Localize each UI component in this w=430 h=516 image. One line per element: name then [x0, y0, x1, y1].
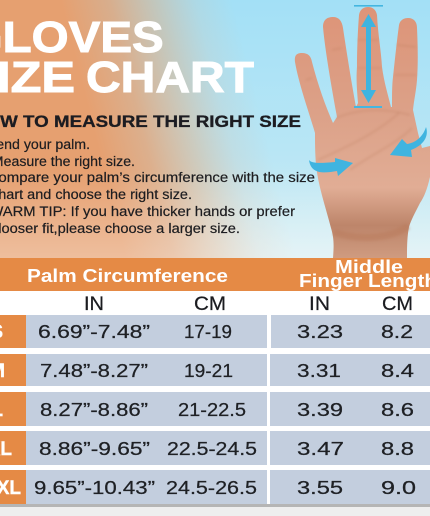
instructions text block	[0, 137, 315, 236]
finger inch values: 3.47	[297, 438, 344, 459]
column headers: IN	[309, 294, 330, 315]
palm inch values: 9.65”-10.43”	[34, 477, 155, 498]
size table	[0, 257, 430, 516]
header bar	[0, 258, 430, 291]
palm cm values: 24.5-26.5	[166, 477, 257, 498]
column headers: IN	[84, 294, 104, 315]
row backgrounds	[26, 315, 430, 504]
icon: left palm arrow	[309, 158, 353, 176]
finger cm values: 8.8	[381, 438, 414, 459]
finger cm values: 8.6	[381, 399, 414, 420]
palm cm values: 22.5-24.5	[167, 438, 257, 459]
header: palm circumference: Palm Circumference	[27, 265, 228, 286]
icon: photo of open hand	[295, 7, 430, 258]
column headers	[84, 294, 413, 315]
finger cm values: 8.2	[381, 321, 413, 342]
finger inch values: 3.31	[297, 360, 341, 381]
table bottom shadow	[0, 504, 430, 516]
column headers: CM	[194, 294, 226, 315]
finger cm values	[381, 321, 416, 498]
column headers: CM	[382, 294, 413, 315]
header: middle finger length	[299, 257, 430, 291]
palm inch values	[34, 321, 155, 498]
finger cm values: 8.4	[381, 360, 414, 381]
palm inch values: 8.86”-9.65”	[39, 438, 150, 459]
finger inch values: 3.55	[297, 477, 343, 498]
finger inch values: 3.23	[297, 321, 343, 342]
table white base	[0, 258, 430, 504]
icon: middle finger length arrow	[354, 5, 383, 108]
icon: right palm arrow	[390, 127, 427, 157]
palm cm values: 17-19	[184, 321, 232, 342]
finger cm values: 9.0	[381, 477, 416, 498]
header: middle finger length: Middle	[335, 257, 403, 277]
title: CHART	[86, 53, 254, 102]
finger inch values: 3.39	[297, 399, 343, 420]
palm inch values: 8.27”-8.86”	[40, 399, 148, 420]
finger inch values	[297, 321, 344, 498]
title	[0, 13, 254, 102]
background gradient	[0, 0, 430, 258]
palm inch values: 6.69”-7.48”	[38, 321, 150, 342]
palm inch values: 7.48”-8.27”	[40, 360, 148, 381]
size column	[0, 315, 26, 504]
header: middle finger length: Finger Length	[299, 271, 430, 291]
palm cm values	[166, 321, 257, 498]
palm cm values: 21-22.5	[178, 399, 246, 420]
palm cm values: 19-21	[184, 360, 233, 381]
